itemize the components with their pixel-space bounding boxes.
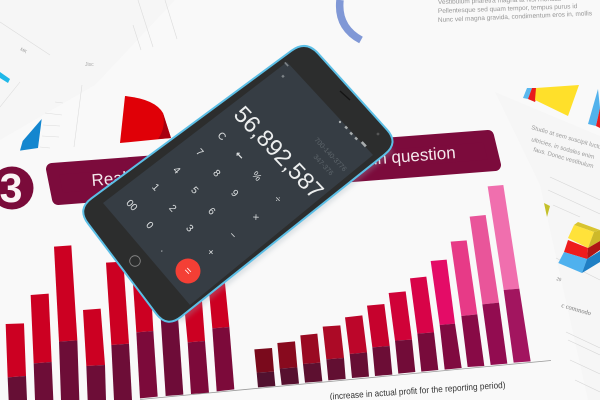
calculator keypad: 3: [183, 223, 195, 235]
text: right sheet labels: c commodo: [560, 302, 592, 317]
calculator keypad: −: [226, 230, 238, 242]
calculator keypad: 00: [123, 198, 139, 214]
phone: smartphone with calculator: [83, 46, 393, 322]
calculator keypad: C: [215, 130, 228, 143]
icon: red pie slice: [120, 96, 171, 143]
icon: earpiece speaker: [340, 91, 350, 100]
text block: right sheet paragraph: [530, 125, 600, 170]
badge: number 3: [0, 165, 34, 211]
calculator keypad: %: [249, 170, 263, 184]
badge: number 3: 3: [0, 165, 22, 211]
text: secondary display: 347-376: [312, 154, 334, 177]
text: banner left fragment: Real: [91, 168, 127, 190]
text: right sheet labels: 20: [555, 277, 562, 283]
icon: top right yellow and red funnel: [523, 85, 579, 116]
calculator keypad: 2: [166, 203, 178, 215]
calculator keypad: 5: [188, 185, 200, 197]
calculator keypad: +: [204, 247, 216, 259]
bar chart: right group rising: [254, 185, 531, 387]
panel: top-left background sheet: MK: [20, 47, 28, 54]
text: secondary display: 700-140-3776: [313, 137, 347, 173]
calculator keypad: 7: [193, 147, 205, 159]
icon: cyan chart fragment: [0, 72, 10, 83]
calculator keypad: 8: [210, 168, 222, 180]
phone screen: [103, 62, 373, 305]
calculator keypad: 9: [228, 188, 240, 200]
phone shadow: [160, 70, 394, 322]
icon: status bar glyphs: [339, 121, 367, 147]
text: right sheet labels: [555, 277, 592, 317]
calculator keypad: 0: [143, 220, 155, 232]
calculator keypad: .: [158, 245, 168, 254]
icon: top menu dots: [281, 62, 289, 78]
icon: blue arc: [340, 0, 361, 40]
text block: right sheet paragraph: faus. Donec vestibulum: [532, 147, 594, 170]
equals button: [176, 258, 200, 284]
panel: right-hand sheet: [495, 92, 600, 400]
text block: top right bullet list: Pellentesque sed quam tempor, tempus purus id: [438, 3, 578, 15]
text: banner right fragment: in question: [373, 143, 456, 168]
text: calculator display number: 56,892,587: [229, 101, 329, 204]
calculator keypad: 6: [205, 206, 217, 218]
calculator keypad: ×: [249, 212, 261, 224]
icon: home button: [130, 256, 140, 266]
text block: right sheet paragraph: ultricies, in sodales enim: [530, 137, 595, 161]
calculator keypad: ←: [232, 149, 246, 163]
calculator keypad: 4: [170, 165, 182, 177]
icon: front camera: [377, 133, 379, 135]
text block: top right bullet list: Nunc vel magna gravida, condimentum eros in, mollis: [438, 10, 593, 24]
panel: top-left background sheet: [0, 0, 177, 148]
icon: blue triangle chart shape: [20, 119, 42, 151]
text block: top right bullet list: [438, 0, 593, 24]
bar chart: left group: [6, 245, 234, 400]
icon: stacked cube: [544, 203, 600, 273]
axis line: [140, 360, 551, 400]
panel: top-left background sheet: Jisc: [85, 62, 94, 68]
phone body: [83, 46, 393, 322]
banner: question heading: [52, 136, 495, 199]
equals button: =: [181, 265, 194, 278]
calculator keypad: ÷: [271, 194, 284, 206]
icon: top right blue and red bar: [588, 89, 600, 128]
calculator keypad: [123, 130, 284, 259]
calculator keypad: 1: [149, 182, 161, 194]
